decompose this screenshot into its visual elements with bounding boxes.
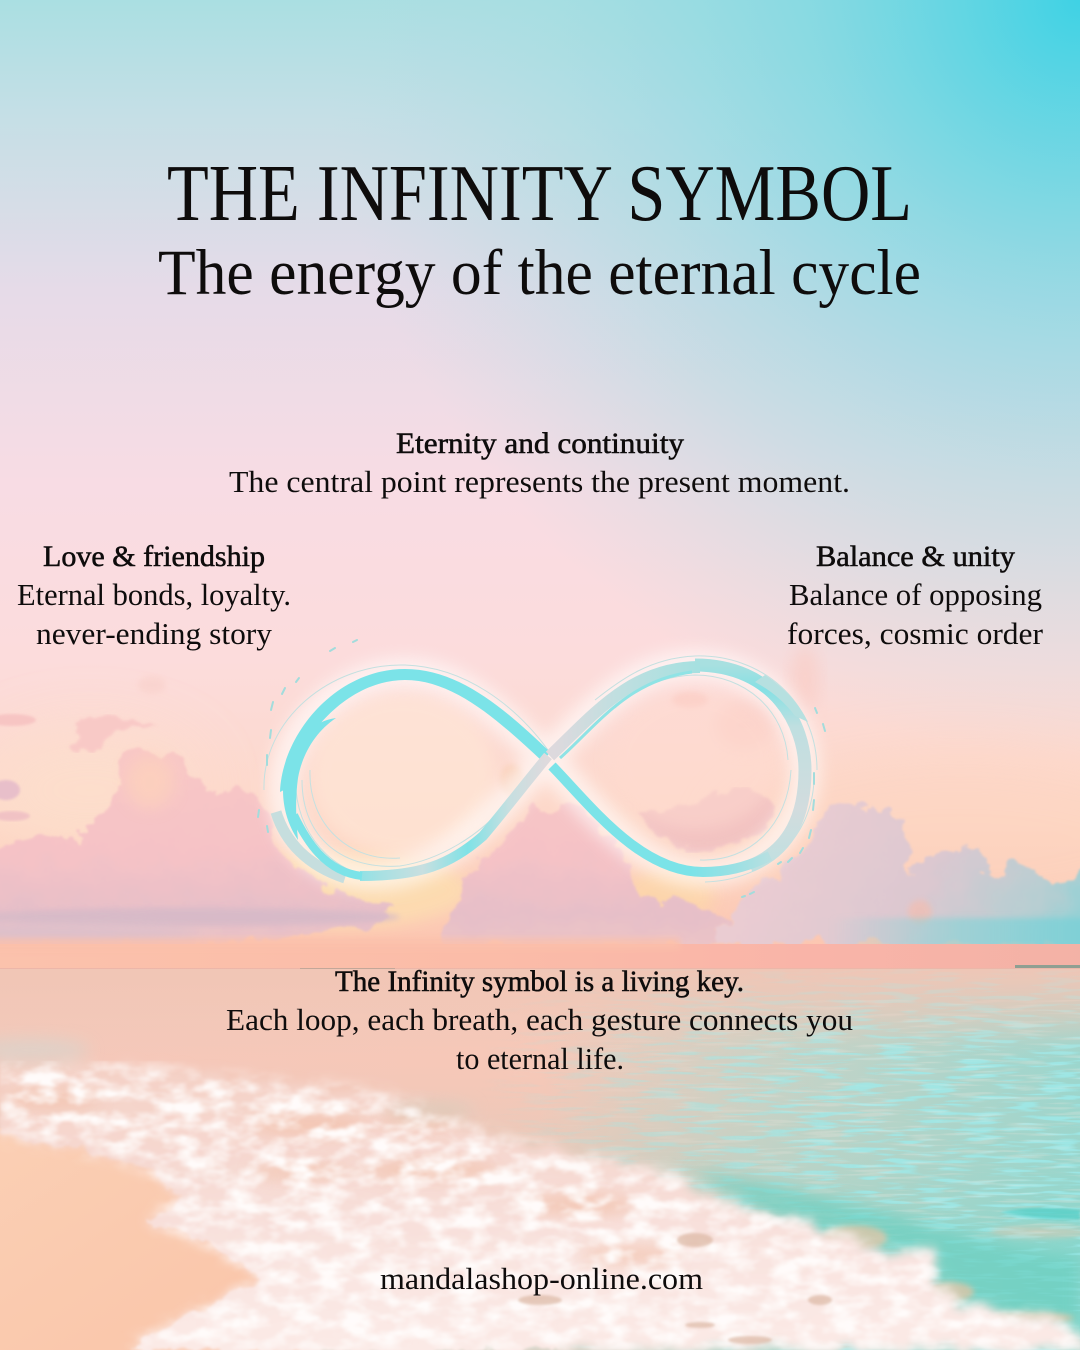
background: clouds	[0, 646, 1080, 970]
heading: living key: The Infinity symbol is a living key.	[335, 965, 744, 998]
brush dashes	[258, 640, 825, 897]
pale brush band: lower left	[276, 812, 345, 878]
water ripples	[520, 974, 1080, 1350]
text block: living key	[226, 965, 853, 1076]
background: sunset sky	[0, 0, 1080, 968]
text block: balance and unity	[787, 540, 1044, 651]
heading: love: Love & friendship	[43, 540, 265, 573]
text block: love and friendship	[17, 540, 291, 651]
cyan brush stroke: top left to bottom right	[280, 669, 770, 872]
cloud: wisps	[0, 676, 166, 821]
body: eternity: The central point represents the present moment.	[229, 464, 850, 499]
background: sea	[0, 965, 1080, 1350]
website address: mandalashop-online.com	[380, 1261, 703, 1296]
body: living key line 1: Each loop, each breath, each gesture connects you	[226, 1002, 853, 1037]
cloud: inside right loop	[500, 646, 819, 850]
cyan brush stroke: lower left	[294, 815, 362, 876]
background: sea foam	[0, 1038, 1080, 1350]
symbol outer glow	[283, 665, 805, 875]
body: balance line 2: forces, cosmic order	[787, 616, 1044, 651]
body: balance line 1: Balance of opposing	[789, 577, 1042, 612]
heading: balance: Balance & unity	[816, 540, 1015, 573]
shallow teal wave	[690, 1170, 1080, 1345]
cloud: centre bank	[440, 804, 723, 948]
subtitle: The energy of the eternal cycle	[158, 237, 921, 309]
body: love line 1: Eternal bonds, loyalty.	[17, 577, 291, 612]
distant islands	[1015, 965, 1080, 968]
background: sand	[0, 1128, 320, 1350]
symbol interior glow	[311, 690, 780, 857]
horizon glow band	[0, 938, 1080, 970]
text block: eternity and continuity	[229, 427, 850, 499]
title: THE INFINITY SYMBOL	[167, 150, 912, 238]
infinity symbol	[258, 640, 825, 897]
wet sand under the wave	[823, 1225, 1074, 1324]
body: love line 2: never-ending story	[36, 616, 273, 651]
heading: eternity: Eternity and continuity	[396, 427, 684, 460]
fine brush rings	[264, 656, 817, 882]
body: living key line 2: to eternal life.	[456, 1041, 624, 1076]
cloud: right bank	[715, 803, 1080, 945]
cloud: left bank	[0, 752, 400, 950]
crescent tail	[283, 718, 336, 840]
brush stroke: right loop	[695, 665, 805, 866]
brush stroke: rising diagonal	[550, 667, 700, 756]
brush stroke: lower diagonal	[360, 756, 548, 876]
